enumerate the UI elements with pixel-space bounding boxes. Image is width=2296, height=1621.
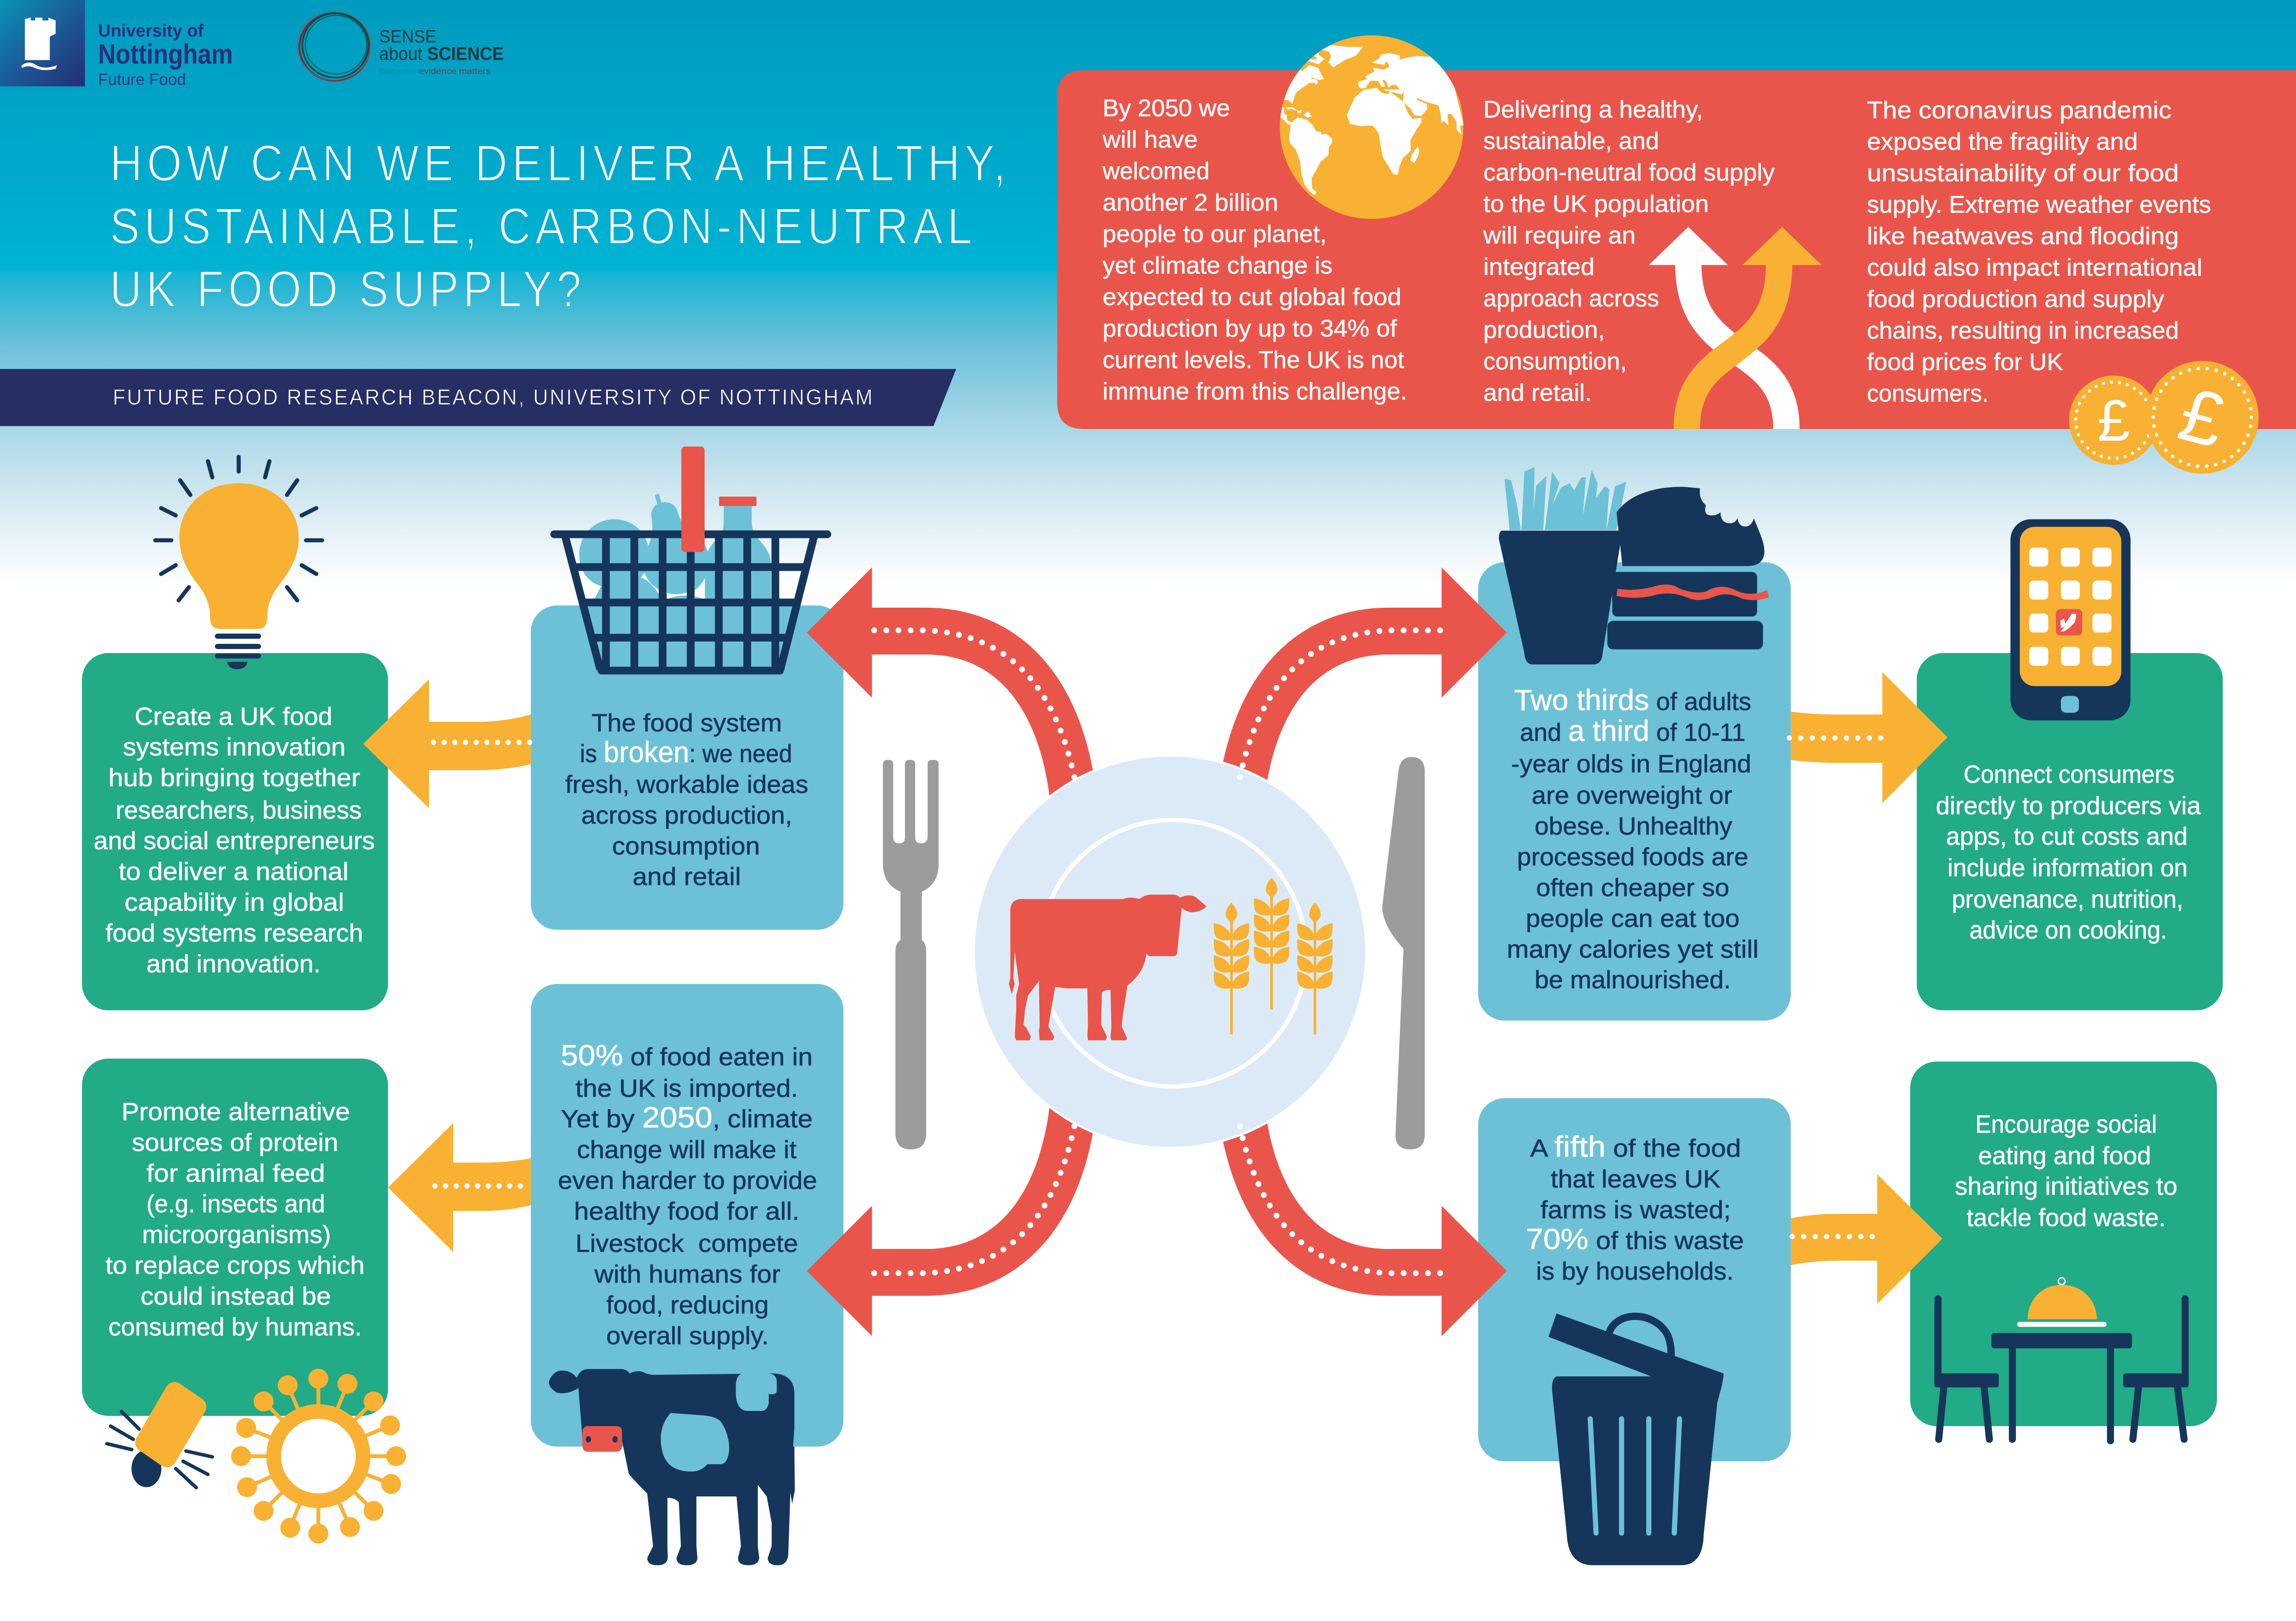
logo: University of Nottingham: University of — [98, 21, 204, 41]
text: 50% of food imported: healthy food for all. — [574, 1197, 799, 1225]
text: population and climate: another 2 billion — [1103, 189, 1279, 216]
text: promote alternative sources of protein: microorganisms) — [142, 1221, 331, 1249]
text: 50% of food imported — [558, 1039, 817, 1350]
text: promote alternative sources of protein: to replace crops which — [106, 1252, 365, 1279]
text: 50% of food imported: the UK is imported. — [575, 1074, 798, 1102]
text: coronavirus pandemic: supply. Extreme weather events — [1867, 192, 2211, 218]
panel: green box alternative protein — [82, 1059, 388, 1416]
text: integrated approach: integrated — [1483, 254, 1595, 281]
text: integrated approach: will require an — [1483, 222, 1635, 249]
text: create a UK food systems innovation hub: food systems research — [106, 919, 363, 947]
text: two thirds of adults: people can eat too — [1526, 904, 1740, 932]
icon: red cow on plate — [1009, 895, 1207, 1041]
text: coronavirus pandemic: consumers. — [1867, 380, 1989, 407]
icon: dining table and chairs — [1934, 1278, 2189, 1441]
panel: blue box overweight — [1478, 562, 1791, 1021]
arrow: red bottom right — [1241, 1105, 1507, 1336]
text: population and climate: production by up to 34% of — [1103, 315, 1397, 342]
text: a fifth of food wasted: that leaves UK — [1551, 1165, 1721, 1193]
text: connect consumers to producers: provenance, nutrition, — [1952, 885, 2183, 913]
arrow: orange to connect consumers — [1790, 672, 1947, 803]
logo: Sense about Science: Because evidence matters — [379, 67, 491, 76]
text: encourage social eating: tackle food waste. — [1966, 1204, 2165, 1232]
text: coronavirus pandemic: The coronavirus pandemic — [1867, 97, 2171, 124]
panel: green box innovation hub — [82, 653, 388, 1010]
text: connect consumers to producers — [1936, 761, 2201, 944]
dotted lines on red arrows — [874, 630, 1440, 1273]
text: two thirds of adults: processed foods are — [1517, 843, 1748, 871]
text: two thirds of adults: Two thirds of adults — [1514, 684, 1751, 717]
icon: phone — [2010, 519, 2131, 720]
icon: bin — [1548, 1313, 1723, 1565]
text: integrated approach: consumption, — [1483, 348, 1627, 375]
text: integrated approach: production, — [1483, 317, 1605, 343]
text: coronavirus pandemic: unsustainability of our food — [1867, 160, 2179, 187]
text: population and climate: welcomed — [1102, 158, 1210, 185]
text: integrated approach: to the UK population — [1483, 191, 1709, 218]
text: two thirds of adults: be malnourished. — [1535, 966, 1731, 994]
text: coronavirus pandemic: could also impact international — [1867, 255, 2202, 281]
text: two thirds of adults — [1507, 684, 1759, 994]
icon: wheat — [1214, 878, 1333, 1035]
text: population and climate: people to our planet, — [1103, 221, 1327, 248]
text: the food system is broken: fresh, workable ideas — [565, 771, 808, 798]
text: a fifth of food wasted — [1526, 1131, 1744, 1285]
text: connect consumers to producers: advice on cooking. — [1970, 916, 2167, 944]
text: the food system is broken: across production, — [581, 801, 792, 829]
text: population and climate: immune from this challenge. — [1103, 378, 1407, 405]
title: UK FOOD SUPPLY? — [110, 261, 586, 318]
text: integrated approach: Delivering a healthy, — [1483, 96, 1703, 123]
icon: light bulb — [155, 457, 322, 669]
icon: fork — [883, 760, 939, 1149]
text: integrated approach: sustainable, and — [1483, 128, 1659, 155]
arrow: red bottom left — [807, 1105, 1073, 1336]
text: the food system is broken — [565, 709, 808, 891]
arrow: red top left — [807, 567, 1073, 798]
text: two thirds of adults: many calories yet still — [1507, 935, 1759, 963]
text: two thirds of adults: often cheaper so — [1536, 874, 1729, 902]
panel: green box social eating — [1910, 1061, 2217, 1426]
text: create a UK food systems innovation hub: capability in global — [125, 889, 344, 916]
logo: University of Nottingham — [0, 0, 233, 88]
text: two thirds of adults: -year olds in England — [1511, 750, 1751, 778]
icon: pound coins: £ — [2097, 387, 2130, 453]
panel: blue box imports — [531, 984, 843, 1446]
icon: burger — [1607, 487, 1769, 649]
text: encourage social eating: Encourage social — [1975, 1110, 2157, 1138]
arrow: orange to social eating — [1791, 1174, 1942, 1304]
text: two thirds of adults: obese. Unhealthy — [1535, 812, 1732, 840]
icon: shopping basket — [554, 447, 827, 671]
text: population and climate: will have — [1102, 126, 1198, 153]
panel: blue box food system broken — [531, 605, 843, 930]
text: promote alternative sources of protein: for animal feed — [146, 1160, 325, 1187]
text: coronavirus pandemic: exposed the fragility and — [1867, 129, 2138, 156]
text: the food system is broken: and retail — [633, 863, 741, 891]
text: 50% of food imported: Livestock compete — [575, 1230, 798, 1258]
icon: chips cup — [1499, 530, 1622, 664]
title: SUSTAINABLE, CARBON-NEUTRAL — [110, 198, 977, 255]
text: create a UK food systems innovation hub: systems innovation — [123, 733, 346, 761]
logo: Sense about Science — [297, 11, 504, 81]
text: connect consumers to producers: apps, to cut costs and — [1946, 823, 2188, 850]
text: the food system is broken: The food system — [592, 709, 782, 737]
icon: navy cow — [549, 1369, 795, 1565]
text: population and climate: current levels. The UK is not — [1103, 347, 1404, 374]
icon: microorganism — [231, 1369, 406, 1544]
text: create a UK food systems innovation hub: hub bringing together — [108, 764, 360, 792]
text: connect consumers to producers: Connect consumers — [1964, 761, 2174, 788]
text: 50% of food imported: change will make it — [577, 1136, 797, 1164]
text: 50% of food imported: Yet by 2050 , climate — [561, 1102, 813, 1134]
logo: University of Nottingham: Nottingham — [98, 39, 233, 70]
icon: pound coins — [2069, 361, 2259, 474]
logo: University of Nottingham: Future Food — [98, 71, 186, 88]
text: coronavirus pandemic — [1867, 97, 2211, 407]
text: encourage social eating: eating and food — [1978, 1142, 2151, 1170]
text: a fifth of food wasted: 70% of this waste — [1526, 1223, 1744, 1255]
text: the food system is broken: consumption — [612, 832, 760, 860]
icon: twisted arrows — [1649, 227, 1822, 429]
text: 50% of food imported: with humans for — [594, 1260, 780, 1288]
panel: context (red) — [1057, 70, 2296, 429]
title — [110, 135, 1011, 318]
text: promote alternative sources of protein: sources of protein — [132, 1128, 338, 1156]
arrow: orange to innovation hub — [363, 680, 531, 808]
panel: green box connect consumers — [1917, 653, 2223, 1010]
text: promote alternative sources of protein: consumed by humans. — [108, 1313, 362, 1341]
icon: plate — [974, 755, 1366, 1148]
text: coronavirus pandemic: food production and supply — [1867, 286, 2164, 313]
text: population and climate: By 2050 we — [1103, 95, 1230, 122]
icon: pound coins: £ — [2171, 371, 2234, 464]
text: connect consumers to producers: include information on — [1947, 854, 2188, 882]
text: integrated approach: approach across — [1483, 285, 1659, 312]
text: integrated approach: and retail. — [1483, 380, 1591, 406]
text: a fifth of food wasted: is by households. — [1536, 1258, 1734, 1285]
text: encourage social eating: sharing initiatives to — [1955, 1172, 2177, 1200]
text: integrated approach: carbon-neutral food supply — [1483, 159, 1775, 186]
icon: insect — [107, 1391, 212, 1488]
text: population and climate: yet climate change is — [1103, 252, 1333, 279]
text: a fifth of food wasted: A fifth of the food — [1530, 1131, 1741, 1163]
logo: Sense about Science: about SCIENCE — [379, 44, 504, 64]
subtitle banner — [0, 369, 956, 426]
text: create a UK food systems innovation hub: Create a UK food — [135, 703, 332, 730]
text: 50% of food imported: even harder to provide — [558, 1167, 817, 1195]
icon: fries — [1504, 467, 1626, 530]
text: a fifth of food wasted: farms is wasted; — [1541, 1196, 1731, 1224]
text: promote alternative sources of protein: could instead be — [141, 1282, 331, 1310]
title: HOW CAN WE DELIVER A HEALTHY, — [110, 135, 1011, 192]
text: create a UK food systems innovation hub: and social entrepreneurs — [94, 827, 375, 855]
text: the food system is broken: is broken: we need — [580, 736, 792, 768]
text: coronavirus pandemic: like heatwaves and flooding — [1867, 223, 2179, 250]
text: create a UK food systems innovation hub: and innovation. — [146, 950, 321, 978]
text: 50% of food imported: 50% of food eaten in — [561, 1039, 813, 1072]
icon: knife — [1382, 757, 1425, 1149]
text: encourage social eating — [1955, 1110, 2177, 1232]
text: promote alternative sources of protein: Promote alternative — [122, 1098, 350, 1126]
text: two thirds of adults: and a third of 10-11 — [1520, 715, 1746, 748]
text: 50% of food imported: overall supply. — [606, 1322, 769, 1350]
text: two thirds of adults: are overweight or — [1532, 782, 1732, 810]
panel: blue box food waste — [1478, 1098, 1791, 1461]
text: create a UK food systems innovation hub — [94, 703, 375, 978]
text: create a UK food systems innovation hub: researchers, business — [116, 796, 362, 824]
text: population and climate — [1102, 95, 1407, 405]
text: population and climate: expected to cut global food — [1103, 284, 1401, 311]
text: connect consumers to producers: directly to producers via — [1936, 792, 2201, 820]
icon: globe — [1280, 35, 1464, 219]
logo: Sense about Science: SENSE — [379, 27, 437, 47]
text: 50% of food imported: food, reducing — [606, 1291, 769, 1319]
text: coronavirus pandemic: food prices for UK — [1867, 349, 2063, 376]
text: promote alternative sources of protein: (e.g. insects and — [146, 1190, 325, 1218]
arrow: orange to alternative protein — [388, 1123, 531, 1252]
text: integrated approach — [1483, 96, 1775, 406]
text: create a UK food systems innovation hub: to deliver a national — [119, 858, 349, 885]
text: promote alternative sources of protein — [106, 1098, 365, 1341]
subtitle banner: FUTURE FOOD RESEARCH BEACON, UNIVERSITY OF NOTTINGHAM — [113, 385, 874, 410]
produce in basket — [579, 494, 771, 610]
header background gradient — [0, 0, 2296, 586]
text: coronavirus pandemic: chains, resulting in increased — [1867, 318, 2179, 344]
arrow: red top right — [1241, 567, 1507, 798]
